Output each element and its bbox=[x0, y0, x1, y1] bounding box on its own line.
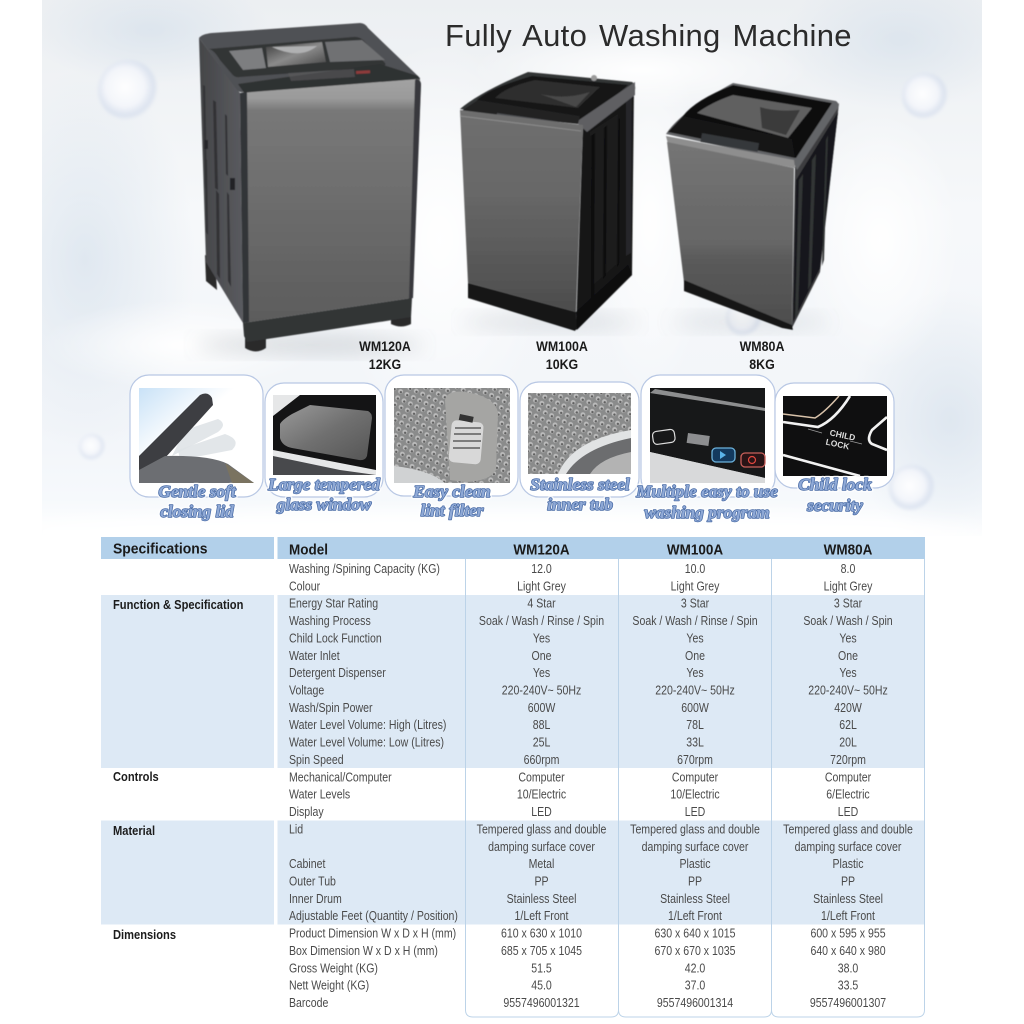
column: WM100A values: 1/Left Front bbox=[668, 910, 723, 923]
base bbox=[684, 280, 793, 330]
column: WM100A values: One bbox=[685, 650, 705, 663]
feature captions: Large tempered bbox=[267, 475, 380, 494]
column: WM100A values: Plastic bbox=[679, 858, 711, 871]
model labels: WM100A bbox=[536, 339, 588, 354]
column: WM80A values: 600 x 595 x 955 bbox=[810, 928, 886, 941]
column: WM120A values: 220-240V~ 50Hz bbox=[502, 685, 581, 698]
column: specification names bbox=[289, 563, 458, 1010]
feature captions: Child lock bbox=[798, 475, 872, 494]
column: WM80A values: 640 x 640 x 980 bbox=[810, 945, 886, 958]
column: specification names: Inner Drum bbox=[289, 893, 342, 906]
feature card: lint filter bbox=[385, 375, 518, 496]
feature captions: Stainless steel bbox=[530, 475, 630, 494]
hero background bbox=[42, 0, 982, 520]
feature captions: Stainless steel bbox=[530, 475, 630, 494]
feature captions bbox=[158, 475, 872, 522]
feature captions: glass window bbox=[276, 495, 372, 514]
title: Fully Auto Washing Machine bbox=[445, 18, 852, 53]
feature card: gentle soft closing lid bbox=[130, 375, 263, 497]
column: WM120A values: Yes bbox=[533, 667, 550, 680]
feature captions: Multiple easy to use bbox=[635, 482, 778, 501]
front face bbox=[240, 79, 421, 323]
column: WM80A values: Yes bbox=[839, 633, 857, 646]
column: WM100A values: LED bbox=[685, 806, 705, 819]
top deck bbox=[199, 23, 420, 92]
column: WM100A values: Light Grey bbox=[671, 581, 720, 594]
column: WM80A values: PP bbox=[841, 876, 855, 889]
column: WM80A values: 8.0 bbox=[841, 563, 855, 576]
category labels bbox=[113, 597, 243, 942]
table heading: model names: Model bbox=[289, 542, 328, 559]
feature captions: glass window bbox=[276, 495, 372, 514]
control panel bbox=[238, 64, 420, 94]
feature captions: Gentle soft bbox=[158, 482, 237, 501]
table header bars bbox=[101, 537, 925, 559]
column: specification names: Barcode bbox=[289, 997, 328, 1010]
column: WM80A values: 420W bbox=[834, 702, 862, 715]
feature captions: Easy clean bbox=[412, 482, 491, 501]
column: specification names: Cabinet bbox=[289, 858, 326, 871]
top bbox=[666, 83, 839, 170]
column: WM100A values: Yes bbox=[686, 667, 704, 680]
side panel bbox=[792, 103, 839, 328]
feature captions: lint filter bbox=[421, 501, 484, 520]
front face bbox=[460, 110, 583, 312]
model labels: 10KG bbox=[546, 357, 578, 372]
feature captions: security bbox=[806, 496, 863, 515]
table heading: model names: WM100A bbox=[667, 542, 723, 559]
feature card: child lock security: CHILD bbox=[829, 427, 856, 443]
column: WM100A values: Stainless Steel bbox=[660, 893, 730, 906]
front face bbox=[667, 142, 794, 328]
column: specification names: Water Inlet bbox=[289, 650, 340, 663]
column: WM120A values: 4 Star bbox=[527, 598, 556, 611]
column: WM100A values: damping surface cover bbox=[642, 841, 749, 854]
feature captions: Easy clean bbox=[412, 482, 491, 501]
product: WM80A washing machine bbox=[666, 83, 839, 330]
category labels: Material bbox=[113, 823, 155, 838]
column: specification names: Outer Tub bbox=[289, 876, 336, 889]
column: WM80A values bbox=[783, 563, 913, 1010]
column: WM120A values: 10/Electric bbox=[517, 789, 566, 802]
column: WM120A values: LED bbox=[531, 806, 552, 819]
column: WM100A values: 78L bbox=[686, 719, 704, 732]
column: specification names: Mechanical/Computer bbox=[289, 772, 392, 785]
table heading: model names bbox=[289, 542, 872, 559]
model labels: 8KG bbox=[749, 357, 775, 372]
feature captions: Large tempered bbox=[267, 475, 380, 494]
feature captions: inner tub bbox=[547, 495, 613, 514]
base bbox=[243, 298, 412, 342]
column: specification names: Wash/Spin Power bbox=[289, 702, 373, 715]
feature captions: washing program bbox=[644, 503, 770, 522]
column: WM120A values: 51.5 bbox=[531, 963, 552, 976]
column: WM120A values: Tempered glass and double bbox=[477, 824, 606, 837]
column: WM100A values: 9557496001314 bbox=[657, 997, 734, 1010]
column: WM80A values: 220-240V~ 50Hz bbox=[808, 685, 888, 698]
model column outlines bbox=[466, 559, 924, 1017]
column: WM120A values: 660rpm bbox=[524, 754, 559, 767]
column: WM120A values bbox=[477, 563, 606, 1010]
column: WM120A values: 610 x 630 x 1010 bbox=[501, 928, 582, 941]
column: WM100A values: Soak / Wash / Rinse / Spin bbox=[632, 615, 758, 628]
column: WM80A values: 33.5 bbox=[838, 980, 858, 993]
base bbox=[468, 283, 577, 331]
column: WM120A values: 1/Left Front bbox=[515, 910, 569, 923]
feature captions: washing program bbox=[644, 503, 770, 522]
category labels: Function & Specification bbox=[113, 597, 243, 612]
column: WM120A values: 685 x 705 x 1045 bbox=[501, 945, 582, 958]
column: WM80A values: Tempered glass and double bbox=[783, 824, 913, 837]
column: specification names: Water Level Volume: Low (Litres) bbox=[289, 737, 444, 750]
column: WM120A values: 600W bbox=[528, 702, 555, 715]
column: WM80A values: Plastic bbox=[832, 858, 864, 871]
feature captions: security bbox=[806, 496, 863, 515]
column: specification names: Colour bbox=[289, 581, 320, 594]
column: specification names: Nett Weight (KG) bbox=[289, 980, 369, 993]
feature captions: closing lid bbox=[160, 502, 234, 521]
column: WM100A values: 220-240V~ 50Hz bbox=[655, 685, 735, 698]
column: WM80A values: Stainless Steel bbox=[813, 893, 883, 906]
column: WM120A values: Soak / Wash / Rinse / Spin bbox=[479, 615, 604, 628]
decorative bubbles bbox=[79, 60, 948, 511]
feature card: stainless steel inner tub bbox=[520, 382, 639, 497]
column: specification names: Spin Speed bbox=[289, 754, 344, 767]
column: WM120A values: PP bbox=[534, 876, 549, 889]
column: WM120A values: 12.0 bbox=[531, 563, 552, 576]
category labels: Controls bbox=[113, 769, 159, 784]
feature card: tempered glass window bbox=[265, 383, 383, 497]
column: WM80A values: 720rpm bbox=[830, 754, 866, 767]
column: specification names: Adjustable Feet (Quantity / Position) bbox=[289, 910, 458, 923]
feature card: child lock security bbox=[775, 383, 894, 488]
column: specification names: Display bbox=[289, 806, 324, 819]
column: specification names: Water Level Volume: High (Litres) bbox=[289, 719, 447, 732]
column: specification names: Energy Star Rating bbox=[289, 598, 378, 611]
column: WM80A values: Light Grey bbox=[824, 581, 873, 594]
column: WM120A values: 9557496001321 bbox=[503, 997, 580, 1010]
column: specification names: Lid bbox=[289, 824, 303, 837]
column: WM100A values: 33L bbox=[686, 737, 704, 750]
column: WM120A values: Computer bbox=[518, 772, 565, 785]
column: specification names: Child Lock Function bbox=[289, 633, 382, 646]
feature captions: Multiple easy to use bbox=[635, 482, 778, 501]
side panel bbox=[576, 83, 634, 330]
column: WM80A values: One bbox=[838, 650, 858, 663]
feature captions: Gentle soft bbox=[158, 482, 237, 501]
column: WM100A values: 670 x 670 x 1035 bbox=[655, 945, 735, 958]
column: WM100A values: 42.0 bbox=[685, 963, 705, 976]
column: WM120A values: Light Grey bbox=[517, 581, 566, 594]
column: WM80A values: 9557496001307 bbox=[810, 997, 886, 1010]
column: WM100A values: Yes bbox=[686, 633, 704, 646]
column: WM100A values: 600W bbox=[681, 702, 709, 715]
column: WM100A values: 630 x 640 x 1015 bbox=[655, 928, 735, 941]
column: WM80A values: 6/Electric bbox=[826, 789, 870, 802]
column: WM80A values: 1/Left Front bbox=[821, 910, 876, 923]
column: specification names: Water Levels bbox=[289, 789, 350, 802]
section bands bbox=[101, 595, 925, 924]
product: WM120A washing machine bbox=[195, 23, 425, 353]
left side bbox=[199, 38, 243, 323]
column: WM100A values: Computer bbox=[672, 772, 718, 785]
column: WM120A values: 25L bbox=[533, 737, 551, 750]
column: WM120A values: 88L bbox=[533, 719, 551, 732]
column: specification names: Gross Weight (KG) bbox=[289, 963, 378, 976]
control panel bbox=[668, 116, 795, 158]
model labels: WM80A bbox=[740, 339, 785, 354]
top bbox=[460, 72, 635, 130]
product: WM100A washing machine bbox=[460, 72, 640, 331]
specification table bbox=[101, 537, 925, 1017]
column: WM80A values: 62L bbox=[839, 719, 857, 732]
column: WM100A values: 670rpm bbox=[677, 754, 713, 767]
model labels: WM120A bbox=[359, 339, 411, 354]
column: WM80A values: 3 Star bbox=[834, 598, 862, 611]
category labels: Dimensions bbox=[113, 927, 176, 942]
column: WM80A values: 38.0 bbox=[838, 963, 858, 976]
column: WM120A values: Metal bbox=[529, 858, 554, 871]
feature card: child lock security: LOCK bbox=[825, 437, 851, 452]
column: WM120A values: damping surface cover bbox=[488, 841, 595, 854]
feature captions: lint filter bbox=[421, 501, 484, 520]
column: WM100A values: 10.0 bbox=[685, 563, 705, 576]
column: WM100A values bbox=[630, 563, 760, 1010]
column: specification names: Voltage bbox=[289, 685, 324, 698]
column: specification names: Detergent Dispenser bbox=[289, 667, 386, 680]
column: WM100A values: Tempered glass and double bbox=[630, 824, 760, 837]
table heading: model names: WM120A bbox=[513, 542, 570, 559]
column: specification names: Washing Process bbox=[289, 615, 371, 628]
column: WM100A values: PP bbox=[688, 876, 702, 889]
column: WM120A values: Stainless Steel bbox=[507, 893, 576, 906]
feature captions: closing lid bbox=[160, 502, 234, 521]
column: WM120A values: Yes bbox=[533, 633, 550, 646]
column: WM80A values: Yes bbox=[839, 667, 857, 680]
column: specification names: Washing /Spining Capacity (KG) bbox=[289, 563, 440, 576]
column: specification names: Box Dimension W x D x H (mm) bbox=[289, 945, 438, 958]
column: WM120A values: One bbox=[532, 650, 551, 663]
feature captions: inner tub bbox=[547, 495, 613, 514]
feature card: washing program panel bbox=[641, 375, 775, 497]
table heading: model names: WM80A bbox=[824, 542, 872, 559]
column: WM100A values: 10/Electric bbox=[670, 789, 720, 802]
column: WM120A values: 45.0 bbox=[531, 980, 552, 993]
column: WM80A values: Soak / Wash / Spin bbox=[803, 615, 893, 628]
column: WM80A values: 20L bbox=[839, 737, 857, 750]
table heading: specifications: Specifications bbox=[113, 541, 207, 558]
column: WM80A values: damping surface cover bbox=[795, 841, 902, 854]
model labels: 12KG bbox=[369, 357, 401, 372]
feet bbox=[205, 255, 411, 352]
column: WM80A values: Computer bbox=[825, 772, 871, 785]
column: specification names: Product Dimension W x D x H (mm) bbox=[289, 928, 456, 941]
control panel bbox=[460, 100, 580, 124]
column: WM80A values: LED bbox=[838, 806, 858, 819]
feature captions: Child lock bbox=[798, 475, 872, 494]
model labels bbox=[359, 339, 785, 372]
column: WM100A values: 37.0 bbox=[685, 980, 705, 993]
column: WM100A values: 3 Star bbox=[681, 598, 709, 611]
